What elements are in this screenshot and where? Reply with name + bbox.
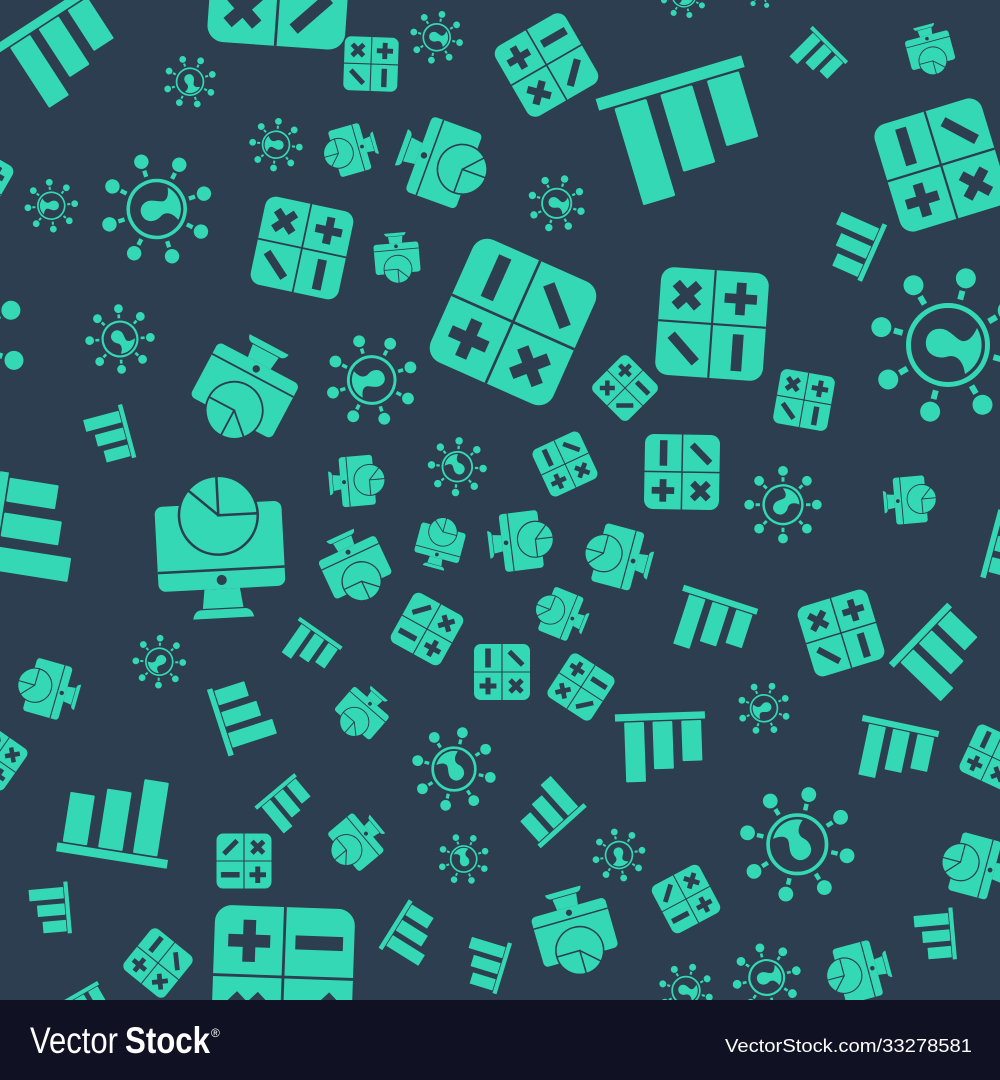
icon: virus bbox=[720, 931, 814, 1024]
icon: monitor pie chart bbox=[902, 20, 958, 80]
icon: monitor pie chart bbox=[327, 678, 397, 748]
icon: virus bbox=[730, 452, 836, 558]
icon: calculator bbox=[249, 195, 355, 301]
icon: bar chart bbox=[82, 404, 136, 468]
icon: bar chart bbox=[980, 509, 1000, 591]
icon: monitor pie chart bbox=[526, 880, 623, 984]
icon: bar chart bbox=[889, 603, 993, 707]
logo: VectorStock: Vector bbox=[30, 1020, 118, 1061]
icon: bar chart bbox=[28, 881, 72, 937]
icon: calculator bbox=[545, 651, 617, 723]
icon: calculator bbox=[216, 834, 272, 888]
icon: virus bbox=[17, 171, 86, 240]
icon: virus bbox=[409, 10, 464, 65]
icon: monitor pie chart bbox=[11, 654, 85, 724]
icon: virus bbox=[0, 259, 32, 419]
icon: virus bbox=[734, 0, 790, 16]
icon: bar chart bbox=[596, 55, 774, 210]
icon: bar chart bbox=[458, 932, 512, 994]
icon: bar chart bbox=[666, 585, 758, 665]
icon: calculator bbox=[644, 434, 720, 510]
icon: calculator bbox=[491, 10, 602, 120]
icon: virus bbox=[153, 45, 227, 119]
icon: virus bbox=[427, 823, 500, 895]
icon: virus bbox=[78, 130, 235, 288]
icon: bar chart bbox=[0, 0, 131, 114]
icon: calculator bbox=[211, 905, 355, 1049]
icon: bar chart bbox=[819, 206, 887, 282]
icon: virus bbox=[583, 819, 655, 891]
icon: calculator bbox=[590, 353, 660, 423]
icon: monitor pie chart bbox=[388, 110, 499, 215]
icon: monitor pie chart bbox=[578, 519, 658, 595]
image id text: VectorStock.com/33278581 bbox=[725, 1036, 972, 1056]
icon: monitor pie chart bbox=[318, 120, 382, 180]
icon: virus bbox=[394, 709, 514, 829]
icon: calculator bbox=[121, 926, 195, 1000]
icon: bar chart bbox=[509, 772, 587, 848]
icon: calculator bbox=[649, 862, 723, 936]
icon: virus bbox=[715, 762, 880, 927]
icon: virus bbox=[73, 292, 167, 386]
icon: bar chart bbox=[0, 471, 83, 593]
icon: monitor pie chart bbox=[318, 805, 394, 879]
icon: bar chart bbox=[786, 26, 848, 88]
logo: VectorStock: ® bbox=[211, 1026, 220, 1040]
icon: bar chart bbox=[851, 715, 939, 789]
icon: virus bbox=[245, 114, 307, 175]
icon: virus bbox=[652, 0, 716, 27]
icon: calculator bbox=[871, 95, 1000, 235]
icon: calculator bbox=[0, 139, 16, 221]
logo: VectorStock: Stock bbox=[125, 1020, 210, 1061]
icon: calculator bbox=[0, 723, 30, 793]
icon: calculator bbox=[772, 368, 836, 432]
footer bar bbox=[0, 1000, 1000, 1080]
icon: virus bbox=[726, 671, 802, 746]
icon: virus bbox=[869, 266, 1000, 424]
icon: bar chart bbox=[54, 981, 116, 1039]
icon: calculator bbox=[474, 644, 530, 700]
icon: calculator bbox=[795, 587, 887, 679]
icon: monitor pie chart bbox=[180, 323, 310, 457]
icon: virus bbox=[416, 426, 498, 508]
icon: monitor pie chart bbox=[153, 473, 287, 621]
icon: calculator bbox=[425, 234, 601, 410]
icon: monitor pie chart bbox=[935, 828, 1000, 904]
icon: virus bbox=[307, 316, 436, 444]
icon: monitor pie chart bbox=[820, 936, 896, 1008]
icon: bar chart bbox=[615, 711, 707, 783]
icon: monitor pie chart bbox=[327, 454, 387, 508]
icon: calculator bbox=[654, 266, 770, 382]
icon: virus bbox=[122, 625, 196, 699]
icon: calculator bbox=[343, 36, 399, 92]
icon: virus bbox=[526, 173, 587, 234]
icon: monitor pie chart bbox=[485, 508, 557, 574]
logo: VectorStock bbox=[30, 1020, 220, 1061]
icon: bar chart bbox=[207, 673, 279, 757]
icon: bar chart bbox=[254, 773, 320, 837]
icon: calculator bbox=[957, 722, 1000, 792]
icon: bar chart bbox=[277, 617, 343, 679]
icon: bar chart bbox=[913, 907, 957, 963]
icon: monitor pie chart bbox=[528, 582, 594, 646]
icon: bar chart bbox=[379, 899, 445, 971]
icon: calculator bbox=[206, 0, 354, 51]
icon: monitor pie chart bbox=[312, 522, 398, 612]
icon: calculator bbox=[530, 429, 600, 499]
icon: calculator bbox=[388, 590, 466, 668]
icon: virus bbox=[658, 962, 714, 1019]
icon: monitor pie chart bbox=[411, 512, 469, 574]
icon: monitor pie chart bbox=[882, 474, 938, 526]
icon: monitor pie chart bbox=[372, 231, 422, 285]
icon: bar chart bbox=[56, 767, 180, 869]
